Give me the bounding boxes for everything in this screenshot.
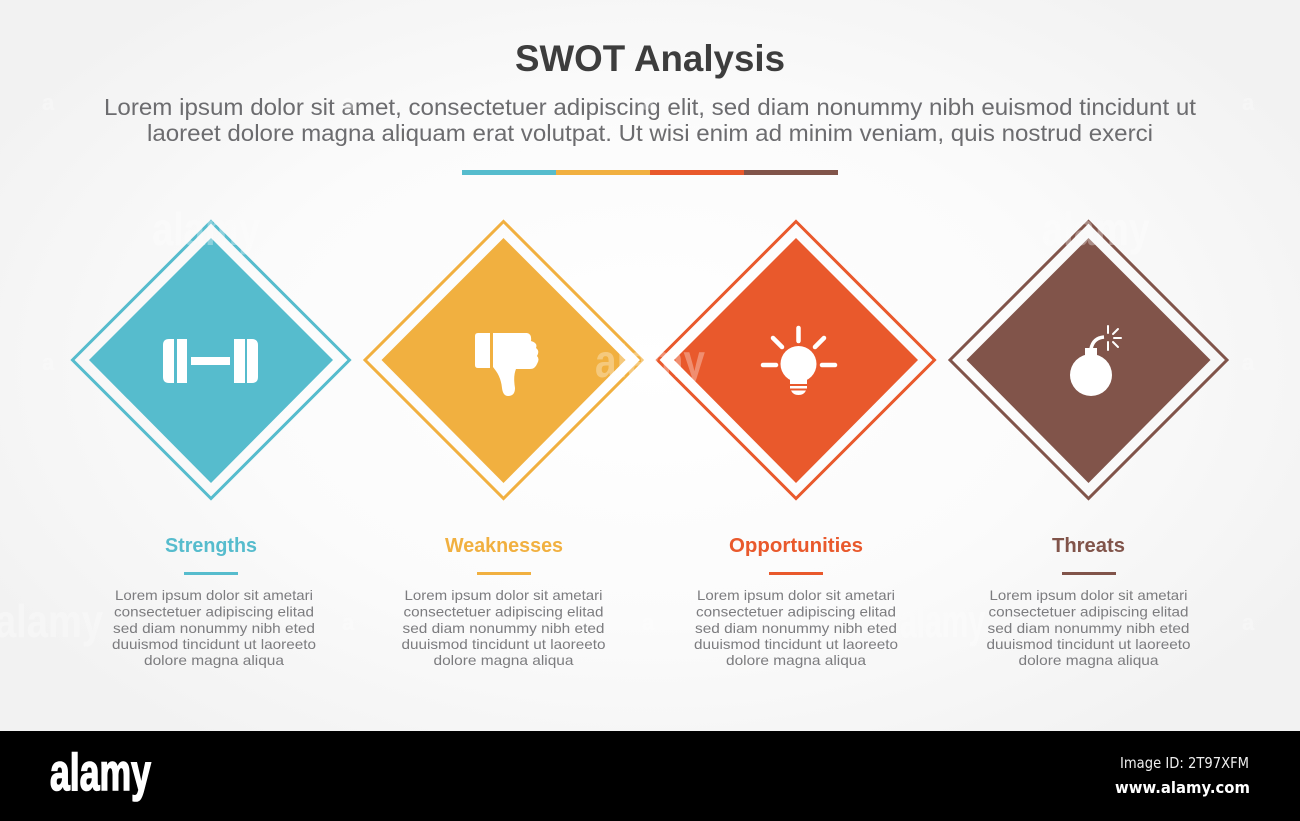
text block: strengths: Lorem ipsum dolor sit ametari bbox=[115, 587, 313, 603]
text block: threats: sed diam nonummy nibh eted bbox=[988, 620, 1190, 636]
watermarks: a bbox=[642, 610, 655, 635]
panel: opportunities diamond bbox=[658, 222, 934, 498]
panel: weaknesses diamond bbox=[365, 222, 642, 498]
intro paragraph bbox=[104, 94, 1197, 146]
watermarks bbox=[0, 90, 1255, 647]
text block: threats: Threats bbox=[1052, 535, 1125, 557]
intro paragraph: Lorem ipsum dolor sit amet, consectetuer adipiscing elit, sed diam nonummy nibh euismod tincidunt ut bbox=[104, 94, 1197, 120]
watermarks: a bbox=[1242, 610, 1255, 635]
footer logo: alamy bbox=[50, 744, 151, 802]
text block: strengths: sed diam nonummy nibh eted bbox=[113, 620, 315, 636]
text block: weaknesses: Lorem ipsum dolor sit ametari bbox=[404, 587, 602, 603]
icon: light bulb bbox=[763, 328, 835, 395]
watermarks: a bbox=[42, 90, 55, 115]
text block: opportunities: Lorem ipsum dolor sit ametari bbox=[697, 587, 895, 603]
text block: weaknesses: sed diam nonummy nibh eted bbox=[402, 620, 604, 636]
text block: strengths bbox=[112, 535, 316, 668]
text block: threats: dolore magna aliqua bbox=[1018, 652, 1159, 668]
watermarks: a bbox=[342, 90, 355, 115]
watermarks: a bbox=[1242, 90, 1255, 115]
panel: threats diamond bbox=[950, 222, 1227, 498]
watermarks: a bbox=[342, 610, 355, 635]
text block: opportunities bbox=[694, 535, 898, 668]
text block: weaknesses: consectetuer adipiscing elitad bbox=[404, 604, 604, 620]
footer band bbox=[0, 731, 1300, 821]
title: SWOT Analysis bbox=[515, 38, 785, 79]
text block: strengths: dolore magna aliqua bbox=[144, 652, 284, 668]
intro paragraph: laoreet dolore magna aliquam erat volutpat. Ut wisi enim ad minim veniam, quis nostrud exerci bbox=[147, 120, 1153, 146]
watermarks: alamy bbox=[595, 335, 705, 387]
image id: Image ID: 2T97XFM bbox=[1120, 754, 1249, 772]
text block: strengths: Strengths bbox=[165, 535, 257, 557]
watermarks: alamy bbox=[1042, 203, 1150, 255]
website: www.alamy.com bbox=[1115, 778, 1250, 797]
text block: opportunities: consectetuer adipiscing elitad bbox=[696, 604, 896, 620]
icon: dumbbell bbox=[163, 339, 258, 383]
icon: thumbs down bbox=[475, 333, 538, 396]
text block: weaknesses: duuismod tincidunt ut laoreeto bbox=[402, 636, 606, 652]
watermarks: a bbox=[42, 350, 55, 375]
text block: threats: consectetuer adipiscing elitad bbox=[988, 604, 1188, 620]
watermarks: a bbox=[1242, 350, 1255, 375]
watermarks: a bbox=[642, 90, 655, 115]
panel: strengths diamond bbox=[72, 222, 350, 498]
watermarks: alamy bbox=[900, 595, 985, 647]
icon: bomb bbox=[1070, 326, 1121, 396]
text block: strengths: duuismod tincidunt ut laoreeto bbox=[112, 636, 316, 652]
text block: threats bbox=[986, 535, 1191, 668]
four-colour title divider bbox=[462, 170, 838, 175]
text block: opportunities: Opportunities bbox=[729, 535, 863, 557]
text block: opportunities: dolore magna aliqua bbox=[726, 652, 866, 668]
text block: weaknesses bbox=[402, 535, 606, 668]
text block: opportunities: duuismod tincidunt ut laoreeto bbox=[694, 636, 898, 652]
text block: weaknesses: dolore magna aliqua bbox=[434, 652, 574, 668]
watermarks: alamy bbox=[152, 203, 260, 255]
text block: weaknesses: Weaknesses bbox=[445, 535, 563, 557]
text block: threats: duuismod tincidunt ut laoreeto bbox=[986, 636, 1191, 652]
text block: threats: Lorem ipsum dolor sit ametari bbox=[990, 587, 1188, 603]
text block: opportunities: sed diam nonummy nibh eted bbox=[695, 620, 897, 636]
text block: strengths: consectetuer adipiscing elitad bbox=[114, 604, 314, 620]
